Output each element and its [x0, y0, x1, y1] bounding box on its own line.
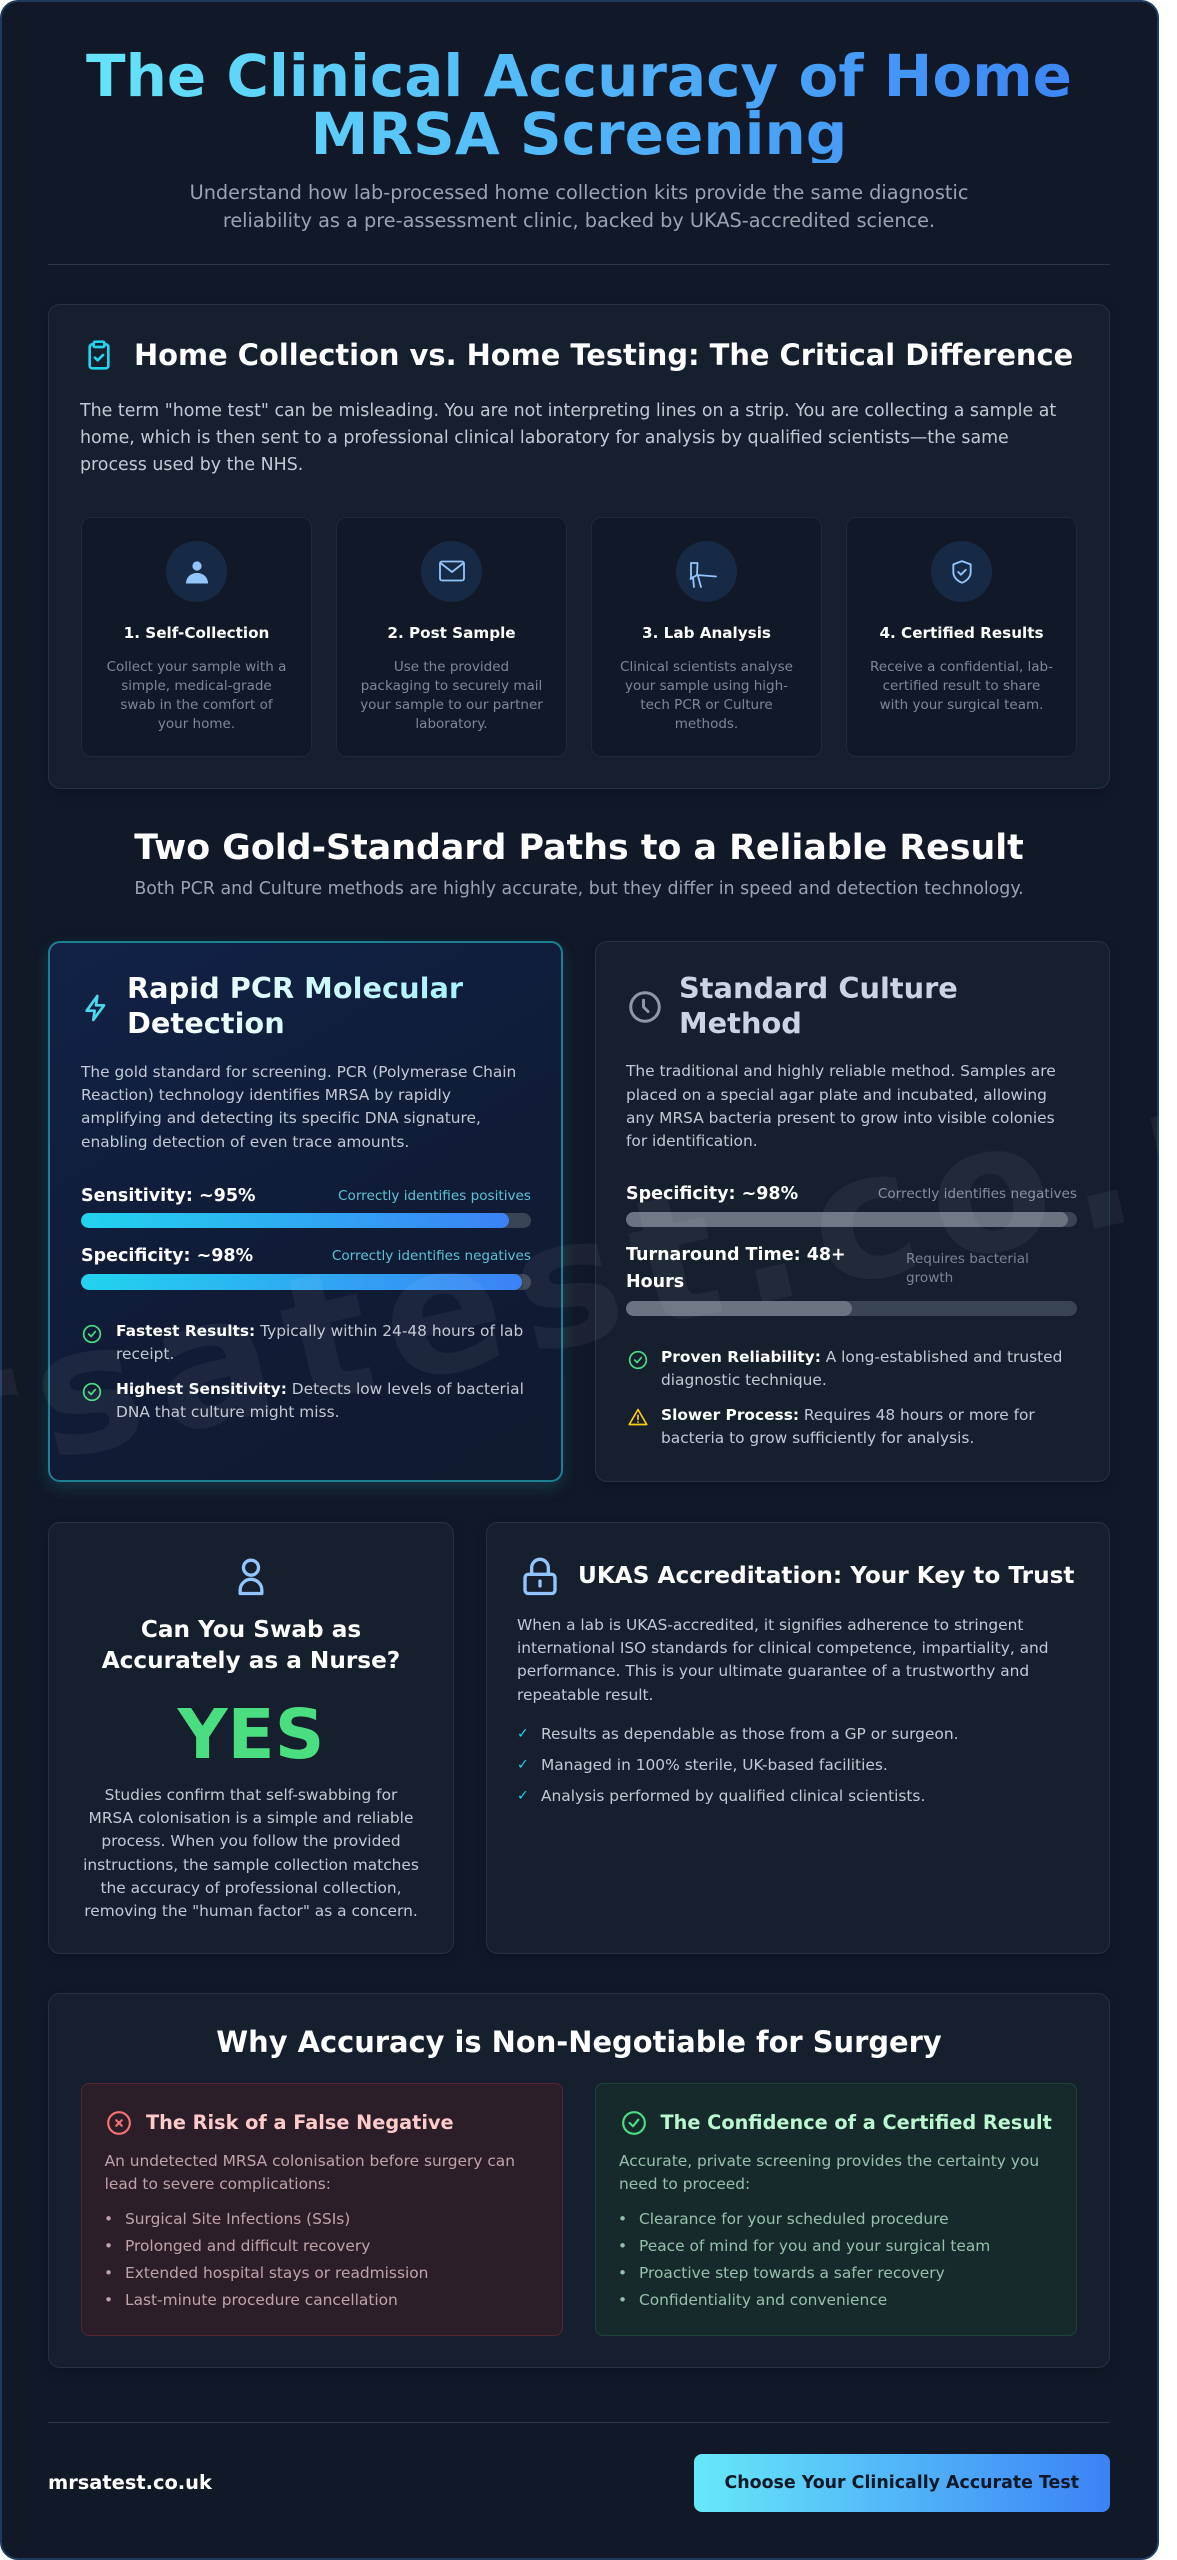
step 4: Receive a confidential, lab-	[870, 658, 1053, 674]
icon: check circle	[622, 2111, 646, 2135]
step 1: swab in the comfort of	[120, 697, 273, 713]
step 4: 4. Certified Results	[879, 624, 1044, 642]
step 4: with your surgical team.	[880, 697, 1043, 713]
confidence text	[619, 2152, 1039, 2193]
risk list: •	[104, 2290, 113, 2308]
explanation: Studies confirm that self-swabbing for	[105, 1786, 397, 1804]
icon: check	[628, 1350, 648, 1370]
risk text: lead to severe complications:	[105, 2175, 331, 2193]
PCR description: Reaction) technology identifies MRSA by rapidly	[81, 1086, 451, 1104]
PCR description: enabling detection of even trace amounts.	[81, 1133, 409, 1151]
bullet: highest sensitivity: Highest Sensitivity: Detects low levels of bacterial	[116, 1380, 524, 1398]
intro paragraph: process used by the NHS.	[80, 455, 303, 475]
panel: can you swab as accurately	[48, 1522, 454, 1954]
icon: x circle	[107, 2111, 131, 2135]
icon: clipboard check	[88, 340, 110, 370]
heading: Two Gold-Standard Paths to a Reliable Result	[134, 828, 1024, 868]
confidence list: Peace of mind for you and your surgical team	[639, 2236, 990, 2254]
stat: specificity: Specificity: ~98%	[626, 1184, 798, 1204]
icon: clock	[629, 991, 661, 1023]
panel: UKAS accreditation	[486, 1522, 1110, 1954]
icon: envelope	[439, 560, 465, 582]
card: false negative	[81, 2083, 563, 2336]
subtitle	[190, 181, 968, 232]
UKAS paragraph: international ISO standards for clinical competence, impartiality, and	[517, 1639, 1049, 1657]
header: title and subtitle	[86, 42, 1072, 232]
risk list: Surgical Site Infections (SSIs)	[125, 2210, 350, 2228]
panel: why accuracy matters	[48, 1993, 1110, 2368]
confidence text: Accurate, private screening provides the certainty you	[619, 2152, 1039, 2170]
title: The Clinical Accuracy of Home	[86, 42, 1072, 110]
icon: check	[82, 1324, 102, 1344]
confidence title: The Confidence of a Certified Result	[660, 2111, 1052, 2134]
step 1: your home.	[158, 716, 235, 732]
stat: turnaround: Hours	[626, 1272, 684, 1292]
bullet: proven reliability: Proven Reliability: A long-established and trusted	[661, 1348, 1062, 1366]
bullet: fastest results	[116, 1322, 523, 1363]
UKAS paragraph: performance. This is your ultimate guarantee of a trustworthy and	[517, 1662, 1029, 1680]
bullet: slower process: bacteria to grow sufficiently for analysis.	[661, 1429, 974, 1447]
icon: person outline	[238, 1558, 264, 1596]
UKAS checklist: Managed in 100% sterile, UK-based facilities.	[541, 1756, 888, 1774]
culture title	[679, 971, 958, 1040]
icon: lock	[523, 1558, 557, 1596]
panel: home collection vs home testing	[48, 304, 1110, 789]
UKAS checklist: Results as dependable as those from a GP or surgeon.	[541, 1724, 958, 1742]
PCR title	[127, 971, 527, 1041]
step 2: packaging to securely mail	[361, 678, 542, 694]
risk list: •	[104, 2264, 113, 2282]
risk list: Extended hospital stays or readmission	[125, 2264, 428, 2282]
title	[48, 47, 1110, 163]
icon: lightning	[85, 994, 106, 1022]
section heading: Home Collection vs. Home Testing: The Critical Difference	[134, 338, 1073, 372]
UKAS checklist	[517, 1724, 958, 1804]
panel: rapid PCR	[48, 941, 563, 1482]
confidence list: Proactive step towards a safer recovery	[639, 2264, 945, 2282]
section heading: two gold-standard paths	[134, 828, 1024, 899]
stat: turnaround: Turnaround Time: 48+	[626, 1244, 846, 1264]
culture description: The traditional and highly reliable method. Samples are	[626, 1062, 1056, 1080]
bullet: highest sensitivity	[116, 1380, 524, 1421]
PCR description: amplifying and detecting its specific DNA signature,	[81, 1109, 481, 1127]
confidence list: •	[618, 2264, 627, 2282]
UKAS checklist: ✓	[517, 1726, 529, 1742]
UKAS checklist: ✓	[517, 1756, 529, 1772]
subtitle: Understand how lab-processed home collection kits provide the same diagnostic	[190, 181, 968, 204]
step 3: 3. Lab Analysis	[642, 624, 771, 642]
explanation	[83, 1786, 419, 1920]
culture description: any MRSA bacteria present to grow into visible colonies	[626, 1109, 1055, 1127]
stat: specificity: Correctly identifies negatives	[332, 1248, 531, 1264]
confidence list: •	[618, 2236, 627, 2254]
step 1: 1. Self-Collection	[124, 624, 269, 642]
stat: specificity	[81, 1246, 531, 1290]
intro paragraph: The term "home test" can be misleading. You are not interpreting lines on a strip. You are collecting a sample at	[80, 400, 1056, 420]
stat: specificity: Correctly identifies negatives	[878, 1186, 1077, 1202]
risk list: Prolonged and difficult recovery	[125, 2236, 370, 2254]
icon: warning	[628, 1408, 648, 1426]
risk list	[104, 2210, 428, 2308]
explanation: removing the "human factor" as a concern.	[84, 1902, 418, 1920]
explanation: MRSA colonisation is a simple and reliable	[89, 1809, 413, 1827]
culture description: placed on a special agar plate and incubated, allowing	[626, 1086, 1047, 1104]
risk text	[104, 2152, 515, 2193]
step 2: 2. Post Sample	[387, 624, 516, 642]
icon: person	[186, 561, 208, 584]
question heading: Accurately as a Nurse?	[102, 1646, 400, 1674]
bullet: proven reliability: diagnostic technique.	[661, 1371, 827, 1389]
YES: YES	[178, 1695, 324, 1775]
question heading	[102, 1616, 400, 1674]
risk text: An undetected MRSA colonisation before surgery can	[105, 2152, 515, 2170]
UKAS checklist: Analysis performed by qualified clinical scientists.	[541, 1786, 925, 1804]
stat: sensitivity: Correctly identifies positives	[338, 1188, 531, 1204]
subtitle: reliability as a pre-assessment clinic, backed by UKAS-accredited science.	[223, 209, 935, 232]
bullet: fastest results: receipt.	[116, 1345, 174, 1363]
heading: Why Accuracy is Non-Negotiable for Surgery	[216, 2025, 942, 2059]
panel: standard culture	[595, 941, 1110, 1482]
risk list: •	[104, 2236, 113, 2254]
confidence list: Clearance for your scheduled procedure	[639, 2210, 949, 2228]
confidence list	[618, 2210, 990, 2308]
risk title: The Risk of a False Negative	[146, 2111, 454, 2134]
PCR description	[80, 1063, 516, 1151]
risk list: Last-minute procedure cancellation	[125, 2290, 398, 2308]
footer: site name: mrsatest.co.uk	[48, 2471, 212, 2494]
step 2: Use the provided	[394, 658, 509, 674]
risk list: •	[104, 2210, 113, 2228]
culture title: Method	[679, 1006, 802, 1040]
stat: turnaround	[626, 1244, 1077, 1316]
step 2: your sample to our partner	[360, 697, 543, 713]
culture title: Standard Culture	[679, 971, 958, 1005]
stat: specificity	[626, 1184, 1077, 1227]
stat: sensitivity: Sensitivity: ~95%	[81, 1186, 256, 1206]
icon: shield check	[952, 560, 972, 584]
UKAS paragraph	[517, 1616, 1049, 1704]
step 3: Clinical scientists analyse	[620, 658, 793, 674]
step 3: your sample using high-	[625, 678, 788, 694]
confidence list: Confidentiality and convenience	[639, 2290, 887, 2308]
confidence list: •	[618, 2290, 627, 2308]
step 1: Collect your sample with a	[107, 658, 286, 674]
stat: specificity: Specificity: ~98%	[81, 1246, 253, 1266]
card: certified result	[594, 2083, 1076, 2336]
stat: sensitivity	[81, 1186, 531, 1228]
UKAS paragraph: When a lab is UKAS-accredited, it signifies adherence to stringent	[517, 1616, 1023, 1634]
bullet: slower process	[661, 1406, 1035, 1447]
PCR description: The gold standard for screening. PCR (Polymerase Chain	[81, 1063, 516, 1081]
step 3	[591, 517, 822, 757]
step 4	[846, 517, 1077, 757]
step 3: methods.	[675, 716, 738, 732]
culture description	[626, 1062, 1056, 1150]
step 1: simple, medical-grade	[121, 678, 272, 694]
bullet: fastest results: Fastest Results: Typically within 24-48 hours of lab	[116, 1322, 523, 1340]
footer: call to action button	[694, 2454, 1110, 2512]
bullet: proven reliability	[661, 1348, 1062, 1389]
step 1	[81, 517, 312, 757]
confidence list: •	[618, 2210, 627, 2228]
step 4: certified result to share	[883, 678, 1040, 694]
bullet: highest sensitivity: DNA that culture might miss.	[116, 1403, 339, 1421]
icon: lab analysis	[690, 562, 717, 588]
intro paragraph	[80, 400, 1056, 475]
footer: call to action button: Choose Your Clinically Accurate Test	[724, 2473, 1079, 2493]
question heading: Can You Swab as	[141, 1616, 361, 1642]
step 3: tech PCR or Culture	[640, 697, 773, 713]
explanation: the accuracy of professional collection,	[100, 1879, 402, 1897]
UKAS heading: UKAS Accreditation: Your Key to Trust	[578, 1562, 1074, 1589]
stat: turnaround: Requires bacterial	[906, 1250, 1029, 1266]
explanation: instructions, the sample collection matches	[83, 1856, 419, 1874]
PCR title: Detection	[127, 1006, 285, 1040]
stat: turnaround: growth	[906, 1270, 953, 1286]
step 2	[336, 517, 567, 757]
subheading: Both PCR and Culture methods are highly accurate, but they differ in speed and detection technology.	[134, 879, 1024, 899]
step 2: laboratory.	[415, 716, 488, 732]
UKAS checklist: ✓	[517, 1788, 529, 1804]
title: MRSA Screening	[311, 100, 847, 168]
culture description: for identification.	[626, 1132, 758, 1150]
bullet: slower process: Slower Process: Requires 48 hours or more for	[661, 1406, 1035, 1424]
icon: check	[82, 1382, 102, 1402]
intro paragraph: home, which is then sent to a professional clinical laboratory for analysis by qualified scientists—the same	[80, 428, 1009, 448]
UKAS paragraph: repeatable result.	[517, 1686, 653, 1704]
PCR title: Rapid PCR Molecular	[127, 971, 463, 1005]
confidence text: need to proceed:	[619, 2175, 750, 2193]
explanation: process. When you follow the provided	[101, 1832, 401, 1850]
